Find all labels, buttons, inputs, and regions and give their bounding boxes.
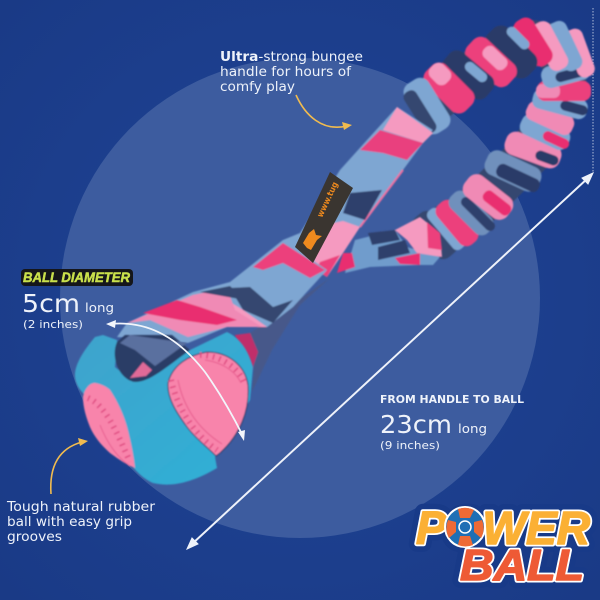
dimension line: handle to ball xyxy=(187,8,593,549)
label: bungee handle: handle for hours of xyxy=(220,65,351,80)
tag: www.tug xyxy=(295,172,353,263)
right grip patch xyxy=(168,352,248,456)
logo: Power Ball: POWER xyxy=(416,502,590,554)
logo: Power Ball: POWER xyxy=(416,502,590,554)
tab stitched patch xyxy=(230,240,327,327)
logo: Power Ball: BALL xyxy=(460,541,584,590)
label: ball diameter xyxy=(21,269,133,331)
arrow: handle callout xyxy=(296,95,352,130)
label: bungee handle: Ultra-strong bungee xyxy=(220,50,363,65)
label: rubber ball xyxy=(6,500,156,545)
label: from handle to ball: 23cm xyxy=(380,410,452,439)
label: rubber ball: Tough natural rubber xyxy=(6,500,156,515)
label: from handle to ball: FROM HANDLE TO BALL xyxy=(380,394,524,406)
bungee handle xyxy=(400,14,597,263)
label: ball diameter: (2 inches) xyxy=(23,318,83,331)
label: bungee handle: comfy play xyxy=(220,80,295,95)
tag: www.tug: www.tug xyxy=(316,181,341,219)
label: bungee handle xyxy=(220,50,363,95)
label: rubber ball: ball with easy grip xyxy=(7,515,132,530)
logo: Power Ball: BALL xyxy=(460,541,584,590)
background circle xyxy=(60,58,540,538)
label: rubber ball: grooves xyxy=(7,530,62,545)
logo: Power Ball: BALL xyxy=(460,541,584,590)
ball hole xyxy=(115,335,190,382)
left grip patch xyxy=(83,383,135,468)
webbing strap xyxy=(117,107,433,392)
label: from handle to ball: long xyxy=(458,422,487,436)
ball diameter arc arrow xyxy=(106,320,245,441)
label: ball diameter: BALL DIAMETER xyxy=(23,269,131,285)
label: from handle to ball: (9 inches) xyxy=(380,439,440,452)
arrow: ball callout xyxy=(51,438,88,494)
label: ball diameter: long xyxy=(85,301,114,315)
logo: Power Ball xyxy=(416,502,590,590)
logo: Power Ball: POWER xyxy=(416,502,590,554)
label: from handle to ball xyxy=(380,394,524,452)
rubber ball xyxy=(75,332,253,485)
lower strap strand xyxy=(337,217,442,273)
label: ball diameter: 5cm xyxy=(22,289,80,318)
